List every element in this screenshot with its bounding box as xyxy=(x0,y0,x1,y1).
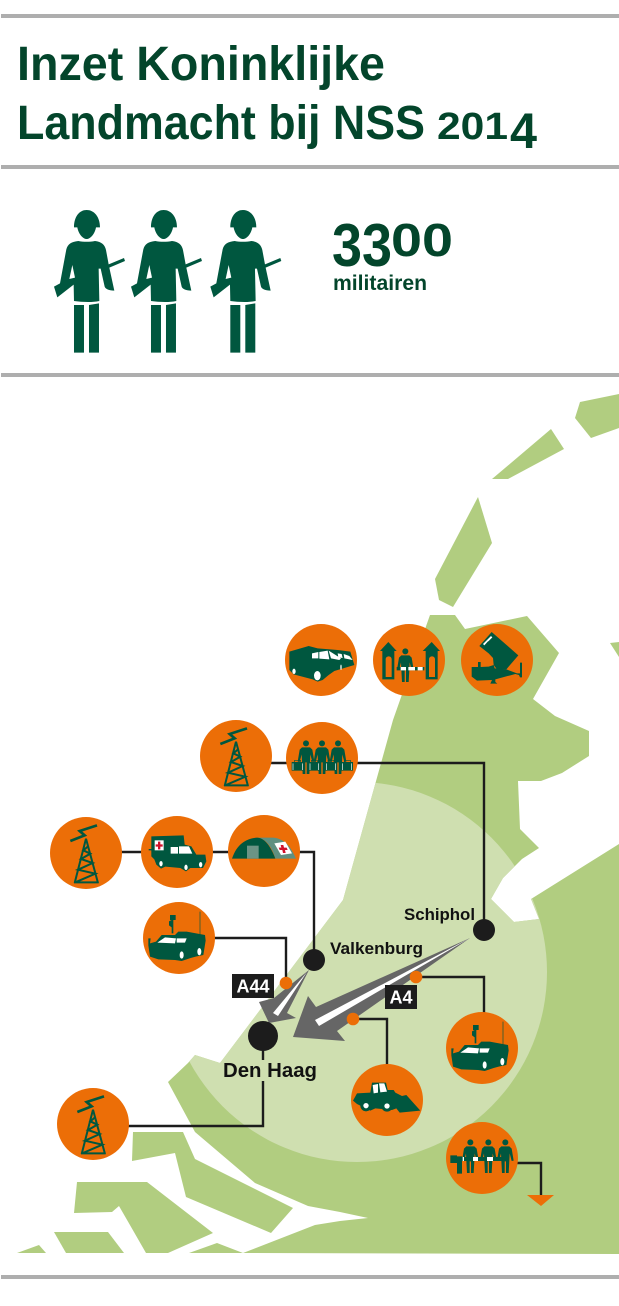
map of the Netherlands coast xyxy=(17,394,619,1254)
icon: medical tent xyxy=(228,815,300,887)
icon: checkpoint with guard xyxy=(373,624,445,696)
icon: missile launcher xyxy=(461,624,533,696)
icon: radio mast, middle row xyxy=(50,817,122,889)
location dot: Den Haag xyxy=(248,1021,278,1051)
statistic: 3300 militairen: 00 xyxy=(391,214,453,266)
icon: radar vehicle, right xyxy=(446,1012,518,1084)
top rule xyxy=(1,14,619,18)
statistic: 3300 militairen xyxy=(332,212,453,295)
arrow: A4 route xyxy=(293,938,470,1041)
soldier icons xyxy=(54,210,281,353)
road sign: A4 xyxy=(385,985,417,1009)
icon: wheel loader xyxy=(351,1064,423,1136)
icon: soldiers with suitcases xyxy=(286,722,358,794)
icon: buses xyxy=(285,624,357,696)
road sign: A44: A44 xyxy=(236,976,270,996)
title: 201 xyxy=(437,106,508,148)
rule under statistic xyxy=(1,373,619,377)
bottom rule xyxy=(1,1275,619,1279)
connector lines xyxy=(121,763,541,1196)
label: Schiphol: Schiphol xyxy=(404,906,475,924)
arrow: down triangle xyxy=(527,1195,554,1206)
statistic: 3300 militairen: 33 xyxy=(332,212,392,279)
title: Inzet Koninklijke xyxy=(17,38,385,91)
icon: radio mast, bottom xyxy=(57,1088,129,1160)
radius circle xyxy=(167,782,547,1162)
icon: soldiers with barrier xyxy=(446,1122,518,1194)
location dot: Schiphol xyxy=(473,919,495,941)
route point dots xyxy=(280,971,422,1025)
label: Valkenburg: Valkenburg xyxy=(330,940,423,958)
title: 4 xyxy=(510,103,537,159)
icon: radio mast, upper row xyxy=(200,720,272,792)
road sign: A44 xyxy=(232,974,274,998)
road sign: A4: A4 xyxy=(389,988,413,1008)
icon: radar vehicle, left xyxy=(143,902,215,974)
label: Den Haag: Den Haag xyxy=(223,1060,317,1082)
rule under title xyxy=(1,165,619,169)
icon: ambulance xyxy=(141,816,213,888)
arrow: A44 route xyxy=(259,970,309,1023)
title xyxy=(17,38,537,159)
statistic: 3300 militairen: militairen xyxy=(333,272,427,295)
location dot: Valkenburg xyxy=(303,949,325,971)
title: Landmacht bij NSS xyxy=(17,97,425,150)
